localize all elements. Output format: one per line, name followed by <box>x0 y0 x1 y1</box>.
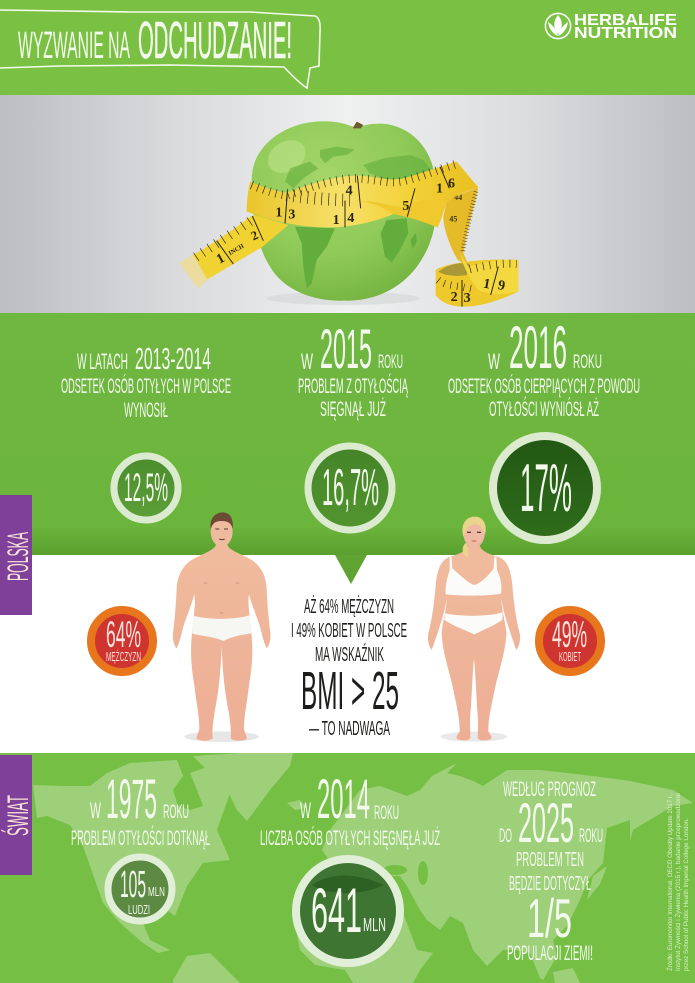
text block: 2025 forecast: PROBLEM TEN <box>516 849 584 871</box>
stat circle: 105 mln: 105 <box>120 864 146 906</box>
header band <box>0 0 695 95</box>
panel: Polska white <box>0 555 695 753</box>
man chest marks <box>204 583 239 613</box>
text block: 2025 forecast: 1/5 <box>527 887 572 949</box>
tape band around apple <box>247 162 478 228</box>
text block: 2025 forecast: BĘDZIE DOTYCZYŁ <box>509 873 591 895</box>
panel: Świat green <box>0 753 695 983</box>
text block: 2014: W <box>300 798 311 823</box>
pointer arrow <box>335 555 367 584</box>
icon: leaf circle <box>545 13 571 39</box>
source note: przez School of Public Health Imperial College London. <box>683 818 690 971</box>
text block: 2016 <box>448 314 640 421</box>
photo panel background <box>0 95 695 313</box>
badge: 64% men: 64% <box>106 614 141 655</box>
man shadow <box>184 731 259 742</box>
stat circle: 641 mln: MLN <box>363 915 386 935</box>
text: ODSETEK OSÓB OTYŁYCH W POLSCE <box>61 375 231 398</box>
text block: 2015: ROKU <box>378 352 403 373</box>
tape right hanging piece: 44 <box>454 192 463 202</box>
logo word 1: HERBALIFE <box>574 12 677 29</box>
tape left hanging piece: 2 <box>249 228 260 243</box>
text block: 2016: ROKU <box>573 352 602 373</box>
text: I 49% KOBIET W POLSCE <box>291 620 407 642</box>
source note <box>665 793 690 971</box>
tab: Polska: POLSKA <box>2 532 35 581</box>
tape band around apple: 4 <box>346 184 353 199</box>
continents on apple <box>285 147 433 288</box>
text block: 2013-2014 <box>61 341 231 422</box>
tape band around apple: 5 <box>402 199 409 214</box>
text block: 2016: W <box>488 349 500 374</box>
text block: 2013-2014: WYNOSIŁ <box>124 399 168 422</box>
speech bubble title: WYZWANIE NA <box>18 25 130 67</box>
stat circle: 641 mln: 641 <box>311 876 362 946</box>
text block: 1975: W <box>90 798 101 823</box>
badge: 64% men <box>91 610 153 672</box>
tab: Świat <box>0 755 35 875</box>
woman ponytail <box>463 543 468 558</box>
text block: 2025 forecast: 2025 <box>518 791 574 854</box>
stat circle: 17% <box>493 436 597 540</box>
text block: 2015 <box>298 317 408 421</box>
text block: BMI: — TO NADWAGA <box>309 718 390 740</box>
man hair <box>210 512 233 529</box>
man face <box>215 529 228 540</box>
badge: 49% women: KOBIET <box>559 649 581 664</box>
text block: 2013-2014: 2013-2014 <box>135 341 211 376</box>
man body <box>173 544 271 741</box>
text: PROBLEM OTYŁOŚCI DOTKNĄŁ <box>71 826 210 850</box>
text block: 2025 forecast: POPULACJI ZIEMI! <box>507 942 593 965</box>
text: LICZBA OSÓB OTYŁYCH SIĘGNĘŁA JUŻ <box>260 827 440 850</box>
tape left hanging piece <box>179 215 288 288</box>
text block: 2015: W <box>301 349 313 374</box>
woman head <box>463 519 485 548</box>
text block: 2015: SIĘGNĄŁ JUŻ <box>320 398 386 421</box>
woman shadow <box>441 732 507 742</box>
apple body <box>252 121 437 301</box>
text block: 2015: 2015 <box>320 317 372 380</box>
woman face <box>467 531 481 534</box>
stat circle: 105 mln <box>108 857 172 921</box>
text block: 1975: ROKU <box>163 802 189 823</box>
photo: apple with measuring tape <box>179 121 518 307</box>
stat circle: 105 mln: MLN <box>148 884 165 899</box>
tape band around apple: 1 <box>436 182 443 197</box>
tape band around apple: 4 <box>347 211 354 226</box>
source note: Instytut Żywności i Żywienia (2015 r.), badanie przeprowadzone <box>673 793 682 971</box>
text block: 2025 forecast <box>499 778 603 965</box>
woman panties <box>444 612 503 634</box>
text block: BMI: AŻ 64% MĘŻCZYZN <box>304 595 394 618</box>
text block: 1975: 1975 <box>106 767 157 830</box>
speech bubble outline <box>0 10 320 88</box>
tape roll: 1 <box>482 276 491 292</box>
man underwear <box>192 615 251 641</box>
tape roll <box>436 253 518 307</box>
stat circle: 16,7% <box>308 446 392 530</box>
woman hair <box>462 517 486 537</box>
apple stem <box>353 122 363 128</box>
figure: woman <box>428 517 520 742</box>
text: ODCHUDZANIE! <box>138 12 292 70</box>
logo word 2: NUTRITION <box>574 25 677 42</box>
speech bubble title <box>0 10 320 88</box>
text block: BMI <box>291 595 407 740</box>
stat circle: 105 mln: LUDZI <box>128 902 150 917</box>
badge: 49% women: 49% <box>552 614 587 655</box>
text block: 2014 <box>260 767 440 850</box>
text: ROKU <box>579 826 603 847</box>
figure: man <box>173 512 271 742</box>
tape roll: 3 <box>464 291 471 306</box>
text block: BMI: MA WSKAŹNIK <box>315 643 384 666</box>
tape left hanging piece: INCH <box>227 243 245 257</box>
text block: 2025 forecast: DO <box>499 826 512 847</box>
text: 16,7% <box>322 459 379 517</box>
panel: Polska green <box>0 313 695 555</box>
badge: 64% men: MĘŻCZYZN <box>106 649 141 664</box>
apple shadow <box>267 292 420 305</box>
woman bra <box>446 557 501 596</box>
logo: Herbalife Nutrition <box>545 12 677 42</box>
text: 12,5% <box>124 466 168 510</box>
tape band around apple: 6 <box>448 176 455 191</box>
badge: 49% women <box>539 610 601 672</box>
text block: 2014: 2014 <box>317 767 370 830</box>
tab: Polska <box>0 495 35 615</box>
tape band around apple: 1 <box>275 206 282 221</box>
text block: 2013-2014: W LATACH <box>77 349 128 374</box>
woman body <box>428 546 520 740</box>
man head <box>211 517 233 547</box>
text block: 2016: 2016 <box>509 314 567 381</box>
tape right hanging piece: 45 <box>449 214 457 223</box>
tape band around apple: 1 <box>333 213 340 228</box>
source note: Źródło: Euromonitor International, OECD Obesity Update 2017 r., <box>665 793 674 971</box>
text block: 1975 <box>71 767 210 850</box>
text block: 2014: ROKU <box>374 803 399 824</box>
stat circle: 17%: 17% <box>520 450 572 526</box>
tape band around apple: 3 <box>288 207 295 222</box>
tape roll: 2 <box>451 290 458 305</box>
tape roll: 9 <box>497 278 506 294</box>
tape left hanging piece: 1 <box>214 251 227 268</box>
text: PROBLEM Z OTYŁOŚCIĄ <box>298 374 408 398</box>
stat circle: 641 mln <box>296 859 400 963</box>
apple highlight <box>262 134 311 180</box>
world map background <box>33 753 693 983</box>
tape right hanging piece <box>443 187 478 268</box>
inland seas <box>383 861 428 885</box>
stat circle: 12,5% <box>114 456 178 520</box>
text: BMI > 25 <box>301 661 399 721</box>
tab: Świat: ŚWIAT <box>1 795 35 836</box>
